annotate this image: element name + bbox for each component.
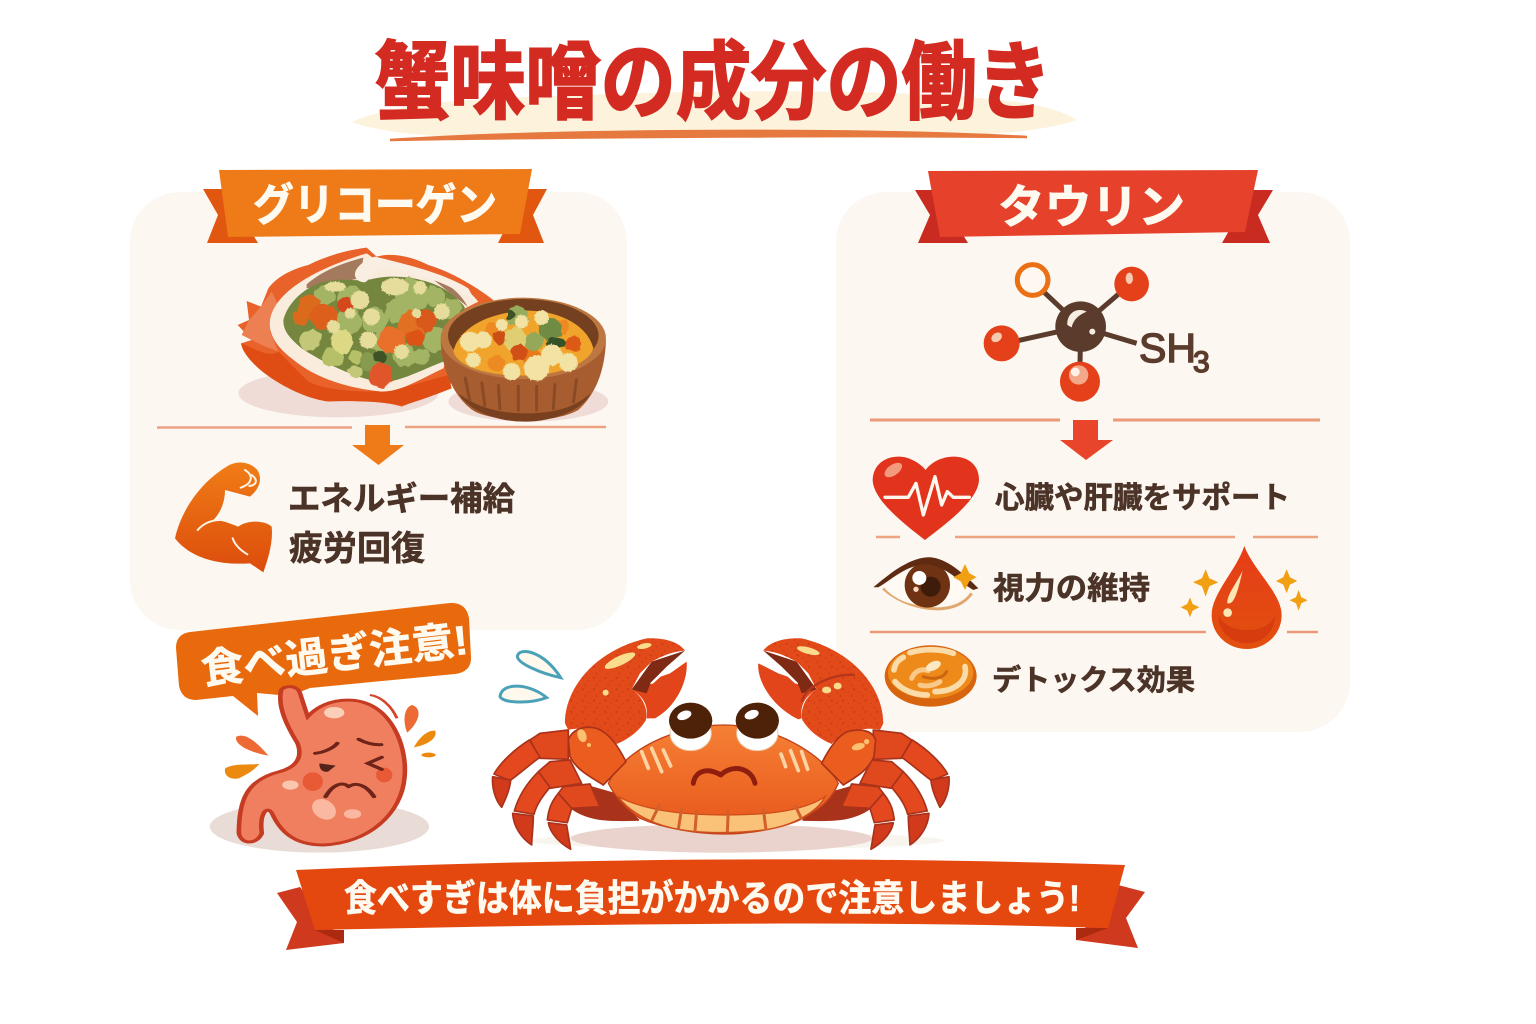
shadow (531, 824, 944, 853)
left legs (492, 730, 638, 849)
ribbon: taurine heading (915, 170, 1273, 243)
panel: glycogen (130, 169, 627, 630)
icon: flexed muscle (175, 463, 272, 572)
text: detox effect: デトックス効果 (992, 663, 1195, 697)
text: energy supply: エネルギー補給 (288, 480, 515, 517)
dividers: row two (870, 631, 1318, 633)
title: 蟹味噌の成分の働き (375, 36, 1052, 131)
right legs (803, 730, 949, 849)
icon: upset stomach (210, 687, 436, 853)
ribbon: taurine heading: タウリン (998, 181, 1185, 233)
divider and arrow: taurine (870, 420, 1320, 460)
panel: taurine (836, 170, 1350, 732)
text: fatigue recovery: 疲労回復 (289, 530, 425, 568)
ribbon: glycogen heading (203, 169, 547, 243)
crab belly (618, 797, 825, 832)
left claw (565, 638, 687, 744)
icon: heart with pulse (873, 457, 979, 540)
callout: overeating warning (176, 603, 471, 716)
text: SH3: SH (1139, 325, 1196, 371)
divider and arrow: glycogen (157, 425, 606, 465)
crab eyes (669, 703, 779, 751)
text: heart and liver support: 心臓や肝臓をサポート (995, 482, 1290, 515)
bowl (441, 340, 606, 420)
crab mouth and blush (642, 748, 808, 783)
ribbon: bottom warning (277, 859, 1145, 950)
callout: overeating warning: 食べ過ぎ注意! (199, 617, 470, 693)
icon: red drop with sparkles (1181, 546, 1308, 649)
ribbon: bottom warning: 食べすぎは体に負担がかかるので注意しましょう! (344, 878, 1080, 919)
icon: eye (873, 557, 978, 609)
icon: detox swirl (885, 645, 977, 707)
text: maintaining eyesight: 視力の維持 (993, 571, 1150, 606)
illustration: crab miso in shell with bowl (238, 248, 608, 422)
right claw (758, 638, 883, 744)
left arm (568, 727, 626, 785)
title underline swoosh (352, 91, 1077, 140)
text: SH3: 3 (1193, 346, 1210, 379)
icon: molecule (984, 265, 1149, 402)
icon: worried crab (492, 638, 949, 853)
ribbon: glycogen heading: グリコーゲン (253, 181, 497, 230)
crab body (608, 725, 838, 834)
right arm (822, 730, 876, 785)
sweat drops (500, 652, 561, 702)
dividers: row one (876, 536, 1318, 538)
